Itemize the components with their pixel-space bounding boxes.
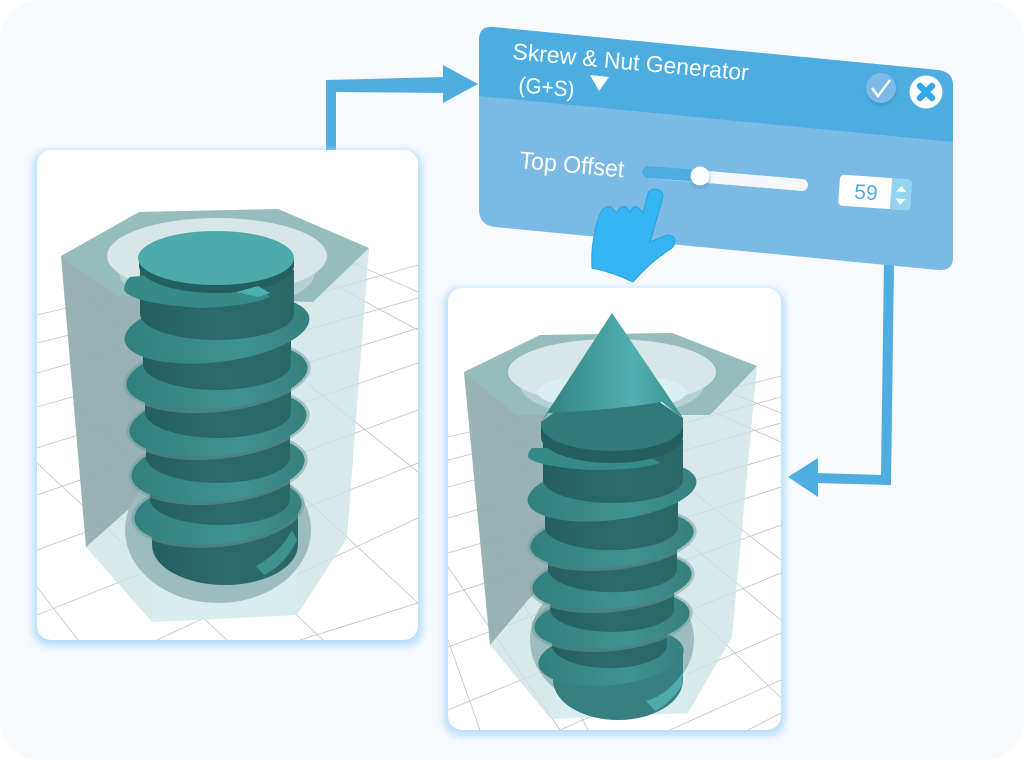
hex nut, right <box>464 333 757 719</box>
build-plate grid <box>448 376 781 730</box>
close button <box>910 76 942 108</box>
build-plate grid <box>37 248 418 640</box>
panel: Skrew & Nut Generator dialog <box>479 27 953 270</box>
dropdown triangle <box>590 75 609 91</box>
confirm button <box>866 73 896 105</box>
icon: pointing hand <box>592 189 675 282</box>
arrow: generator panel to right card <box>788 262 894 497</box>
screw threads, right <box>524 313 700 720</box>
screw threads, left <box>120 231 314 585</box>
dialog header <box>479 27 953 142</box>
numeric input: 59: 59 <box>854 181 878 205</box>
numeric input: 59 <box>838 175 912 210</box>
title: Skrew & Nut Generator <box>512 38 750 85</box>
hex nut, left <box>61 209 369 622</box>
slider <box>648 166 802 188</box>
shortcut label: (G+S) <box>518 72 576 102</box>
dialog body <box>479 27 953 270</box>
panel: left card with short screw <box>33 150 422 646</box>
slider label: Top Offset <box>518 147 626 184</box>
arrow: left card to generator panel <box>326 65 478 150</box>
panel: right card with pointed screw <box>444 288 785 736</box>
